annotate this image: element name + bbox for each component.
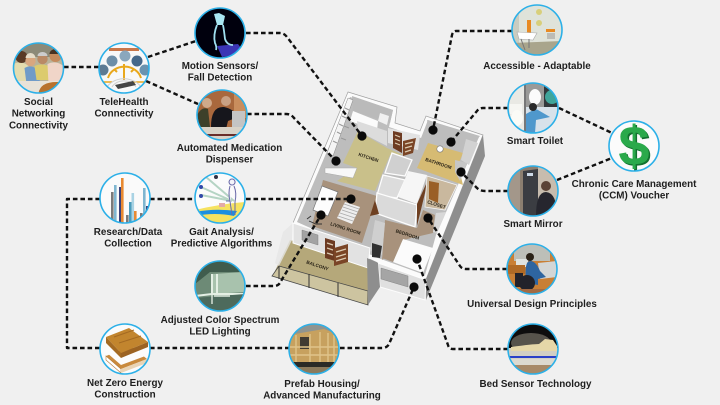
label: Dispenser [206, 155, 253, 166]
node: gait analysis [171, 173, 273, 250]
label: Smart Mirror [503, 219, 563, 230]
interior base [297, 97, 479, 275]
icon: wheelchair user at desk [507, 244, 557, 294]
kitchen room [325, 96, 403, 191]
sensor dots on floor plan [316, 125, 466, 292]
icon: lit room [195, 261, 245, 311]
node: motion sensors [182, 8, 259, 84]
label: Automated Medication [177, 143, 282, 154]
node: research [94, 173, 163, 250]
icon: insulated panels [100, 324, 150, 374]
icon: green dollar sign: $ [620, 116, 651, 178]
node: LED lighting [161, 261, 280, 338]
label: Collection [104, 239, 152, 250]
label: Smart Toilet [507, 136, 564, 147]
label: Predictive Algorithms [171, 239, 273, 250]
label: Prefab Housing/ [284, 379, 360, 390]
node: net zero energy [87, 324, 164, 401]
icon: accessible bathroom [512, 5, 562, 55]
bedroom [382, 210, 446, 273]
living room [307, 180, 377, 243]
floor plan: isometric apartment [272, 92, 485, 305]
closet block [370, 153, 427, 227]
label: TeleHealth [99, 97, 149, 108]
icon: men with dispenser [197, 90, 247, 140]
label: LED Lighting [189, 327, 251, 338]
label: Gait Analysis/ [189, 227, 254, 238]
kitchen wall and door [388, 128, 420, 156]
label: (CCM) Voucher [599, 191, 669, 202]
node: medication dispenser [177, 90, 282, 166]
label: kitchen: KITCHEN [358, 152, 380, 163]
label: closet: CLOSET [427, 199, 446, 210]
node: chronic care voucher [572, 114, 697, 202]
node: social networking [9, 43, 69, 131]
label: Connectivity [94, 109, 154, 120]
label: Social [24, 97, 53, 108]
balcony [272, 223, 370, 305]
node: bed sensor [480, 324, 592, 390]
node: accessible adaptable [483, 5, 591, 72]
label: balcony: BALCONY [306, 260, 330, 272]
label: living room: LIVING ROOM [330, 221, 361, 236]
label: Chronic Care Management [572, 179, 696, 190]
icon: timber frame [289, 324, 339, 374]
node: smart toilet [507, 83, 564, 147]
icon: green dollar sign: $ [618, 114, 650, 177]
label: bathroom: BATHROOM [425, 157, 452, 170]
label: Construction [94, 390, 156, 401]
node: universal design [467, 244, 597, 310]
icon: group of seniors [14, 43, 64, 93]
label: Accessible - Adaptable [483, 61, 591, 72]
label: Adjusted Color Spectrum [161, 315, 279, 326]
node: prefab housing [263, 324, 381, 402]
label: bedroom: BEDROOM [395, 228, 420, 241]
label: Motion Sensors/ [182, 61, 258, 72]
icon: bed with sensors [508, 324, 558, 374]
label: Research/Data [94, 227, 162, 238]
closet room [425, 176, 457, 210]
icon: gait figure [195, 173, 245, 223]
icon: toilet collage [508, 83, 559, 133]
icon: motion skeleton [195, 8, 245, 58]
icon: green dollar sign [609, 114, 659, 178]
icon: telehealth diagram [98, 43, 150, 93]
bathroom [417, 120, 480, 185]
label: Universal Design Principles [467, 299, 597, 310]
label: Networking [12, 109, 65, 120]
label: Connectivity [9, 120, 69, 131]
unit walls outline [293, 92, 483, 282]
icon: bar chart [100, 173, 150, 223]
icon: mirror and person [508, 166, 558, 216]
node: smart mirror [503, 166, 563, 230]
label: Bed Sensor Technology [480, 379, 592, 390]
label: Advanced Manufacturing [263, 391, 381, 402]
dashed connector lines [64, 31, 612, 349]
label: Net Zero Energy [87, 378, 163, 389]
front walls and hall [293, 220, 426, 305]
right exterior wall [425, 135, 485, 300]
label: Fall Detection [188, 73, 252, 84]
node: telehealth [94, 43, 154, 120]
